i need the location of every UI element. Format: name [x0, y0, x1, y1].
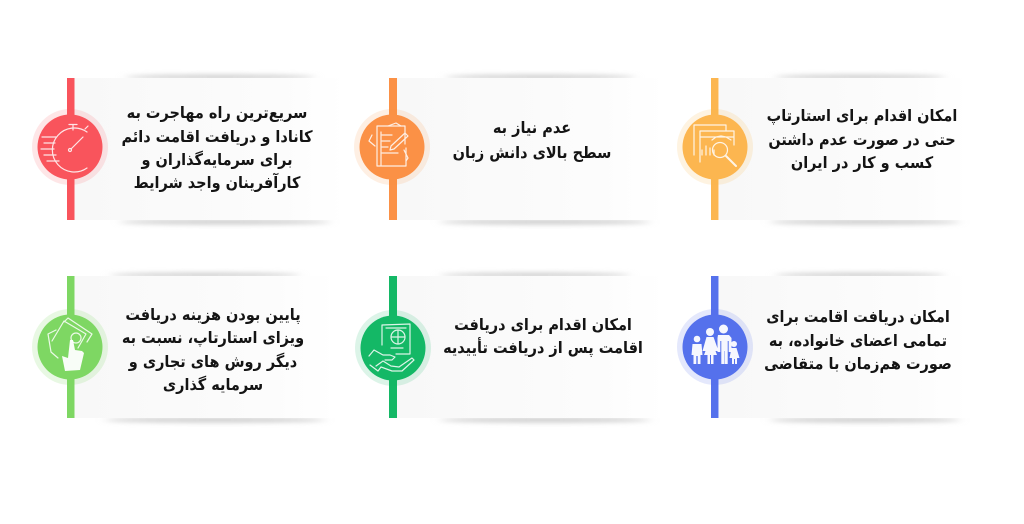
text block: [443, 315, 643, 358]
text block: امکان اقدام برای استارتاپ: [767, 106, 957, 125]
text block: سرمایه گذاری: [163, 375, 263, 394]
text block: ویزای استارتاپ، نسبت به: [122, 328, 304, 347]
text block: سریع‌ترین راه مهاجرت به: [127, 103, 307, 122]
icon: chart window and magnifier: [694, 125, 736, 166]
card: whole family residency: [677, 272, 969, 422]
icon: hand with banknotes: [48, 318, 92, 358]
text block: دیگر روش های تجاری و: [128, 352, 297, 371]
text block: [122, 305, 304, 394]
text block: کارآفرینان واجد شرایط: [134, 172, 301, 192]
text block: امکان اقدام برای دریافت: [454, 315, 632, 334]
text block: کسب و کار در ایران: [791, 153, 933, 172]
text block: [764, 307, 952, 373]
card: no high language level: [354, 74, 665, 224]
text block: اقامت پس از دریافت تأییدیه: [443, 337, 643, 358]
card: startup without business in Iran: [677, 74, 969, 224]
text block: سطح بالای دانش زبان: [453, 143, 611, 162]
text block: حتی در صورت عدم داشتن: [768, 130, 956, 149]
card: low cost: [32, 272, 336, 422]
icon: family: [692, 324, 740, 364]
card: fastest route: [32, 74, 346, 224]
text block: عدم نیاز به: [493, 118, 571, 137]
text block: امکان دریافت اقامت برای: [766, 307, 950, 326]
text block: [453, 118, 611, 162]
icon: passport on hand: [369, 324, 414, 371]
icon: document and pencil: [369, 123, 408, 166]
text block: پایین بودن هزینه دریافت: [125, 305, 301, 325]
text block: تمامی اعضای خانواده، به: [769, 331, 947, 350]
text block: [767, 106, 957, 172]
text block: کانادا و دریافت اقامت دائم: [121, 127, 313, 146]
icon: stopwatch: [41, 124, 88, 172]
card: residency after confirmation: [355, 272, 665, 422]
text block: [121, 103, 313, 192]
text block: برای سرمایه‌گذاران و: [141, 150, 293, 169]
text block: صورت هم‌زمان با متقاضی: [764, 354, 952, 373]
